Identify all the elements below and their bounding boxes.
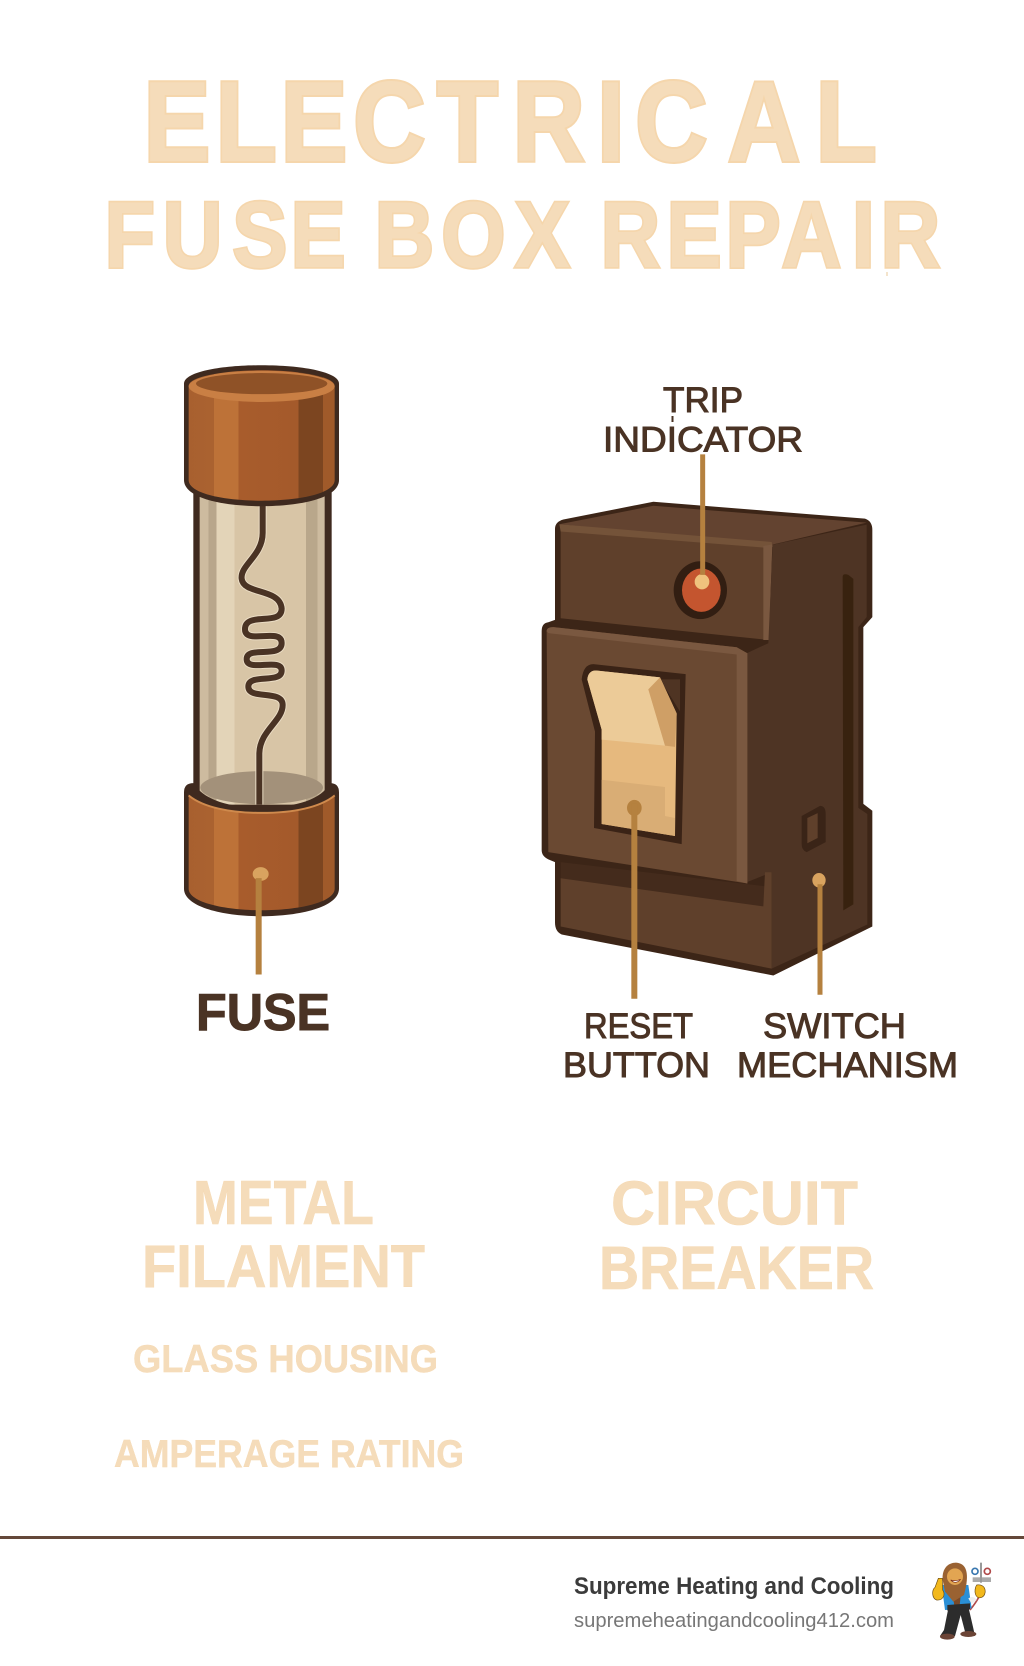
footer brand name: Supreme Heating and Cooling bbox=[574, 1573, 894, 1600]
bottom section bbox=[561, 862, 772, 969]
side face bbox=[747, 525, 867, 969]
label: switch mechanism bbox=[737, 1007, 958, 1085]
label: trip indicator: TRIP bbox=[663, 381, 743, 420]
top surface bbox=[559, 506, 867, 545]
footer divider bbox=[0, 1536, 1024, 1539]
label: circuit breaker: BREAKER bbox=[599, 1234, 874, 1302]
label: metal filament: METAL bbox=[193, 1169, 374, 1238]
reset toggle button bbox=[582, 664, 686, 844]
footer website: supremeheatingandcooling412.com bbox=[574, 1610, 894, 1632]
label: switch mechanism: SWITCH bbox=[763, 1007, 906, 1046]
label: switch mechanism: MECHANISM bbox=[737, 1046, 958, 1085]
glass housing tube bbox=[193, 487, 332, 811]
title: ELECTRICAL bbox=[143, 58, 877, 185]
breaker silhouette bbox=[542, 502, 872, 975]
switch mechanism slot bbox=[802, 806, 826, 852]
icon: lion mascot bbox=[933, 1563, 991, 1640]
label: fuse: FUSE bbox=[196, 984, 330, 1042]
trip indicator light bbox=[674, 561, 727, 619]
leader line: fuse bbox=[253, 867, 269, 975]
title bbox=[105, 58, 940, 287]
leader line: trip indicator bbox=[700, 454, 705, 575]
top copper cap bbox=[184, 365, 339, 506]
title: FUSE BOX REPAIR bbox=[105, 182, 940, 287]
front panel bbox=[547, 627, 747, 883]
label: amperage rating: AMPERAGE RATING bbox=[114, 1433, 464, 1476]
label: circuit breaker: CIRCUIT bbox=[611, 1170, 858, 1238]
bottom copper cap bbox=[184, 783, 339, 916]
leader line: reset button bbox=[627, 800, 642, 999]
label: reset button bbox=[563, 1007, 710, 1085]
label: reset button: BUTTON bbox=[563, 1046, 710, 1085]
label: trip indicator: INDICATOR bbox=[603, 420, 803, 460]
metal filament wire bbox=[242, 496, 283, 805]
upper front face bbox=[559, 524, 773, 640]
label: glass housing: GLASS HOUSING bbox=[133, 1338, 438, 1381]
label: metal filament bbox=[142, 1169, 425, 1300]
label: circuit breaker bbox=[599, 1170, 874, 1302]
label: metal filament: FILAMENT bbox=[142, 1233, 425, 1300]
icon: glass tube fuse bbox=[184, 365, 339, 975]
leader line: switch mechanism bbox=[812, 873, 826, 995]
label: trip indicator bbox=[603, 381, 803, 460]
icon: circuit breaker bbox=[542, 454, 872, 999]
label: reset button: RESET bbox=[584, 1007, 693, 1046]
